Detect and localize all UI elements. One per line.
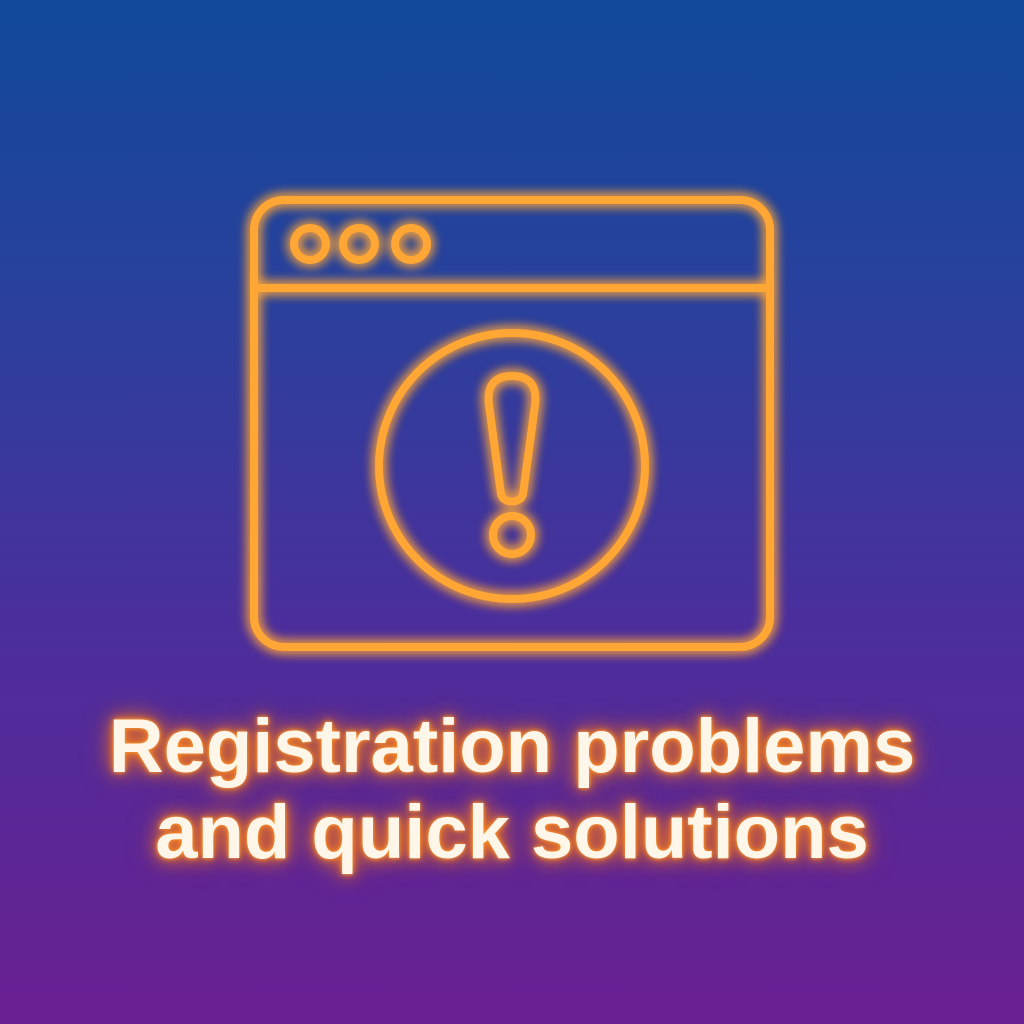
browser frame xyxy=(254,200,770,647)
warning circle xyxy=(379,333,645,599)
window dots xyxy=(294,228,427,260)
title: Registration problems xyxy=(109,704,915,789)
exclamation mark xyxy=(489,376,535,554)
title xyxy=(94,700,928,888)
title: and quick solutions xyxy=(155,790,869,875)
